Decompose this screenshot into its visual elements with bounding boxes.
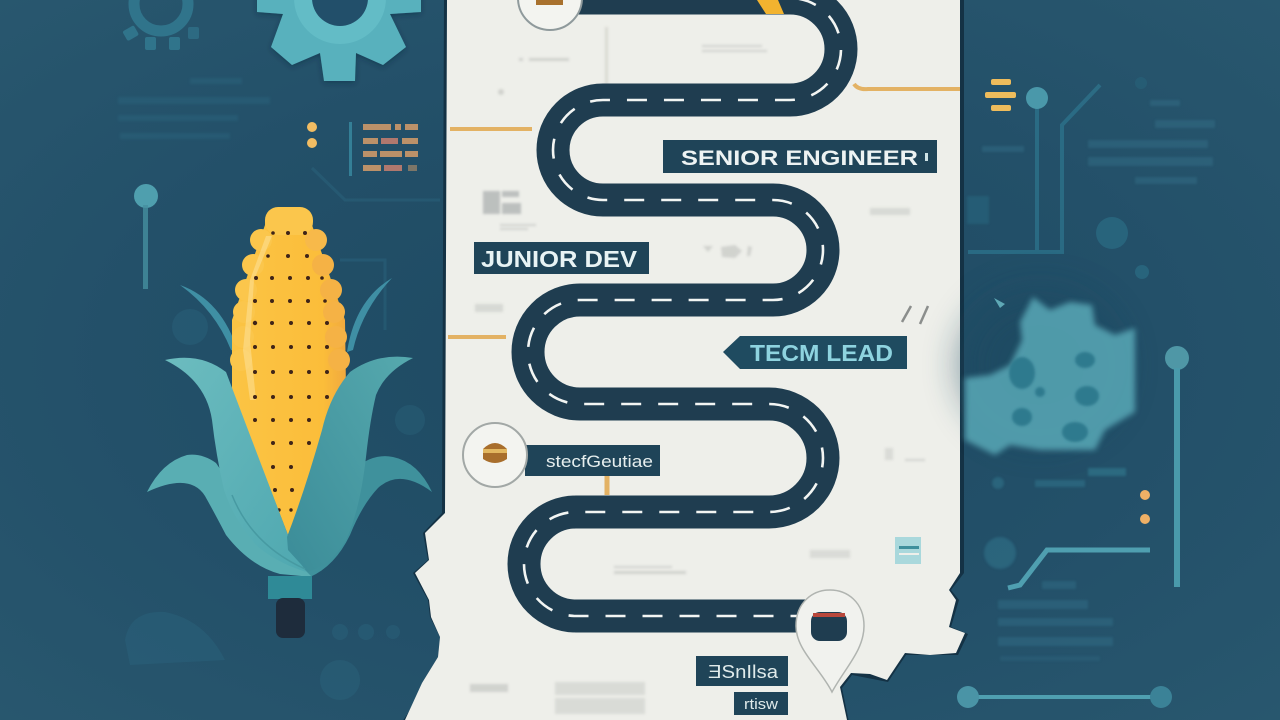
accent slashes <box>902 306 928 324</box>
label: JUNIOR DEV <box>474 242 649 274</box>
icon: pin node upper right <box>1026 87 1048 109</box>
faded circles right <box>1096 77 1149 279</box>
big right leaf <box>287 357 413 572</box>
kernel dots <box>253 231 329 512</box>
icon: orange dots left <box>307 122 317 148</box>
road centre dashes <box>524 0 841 616</box>
side note: small coloured text lines <box>349 122 418 176</box>
leaf crease <box>232 495 305 569</box>
ghost text block: upper left <box>118 78 270 139</box>
label: SENIOR ENGINEER: SENIOR ENGINEER <box>681 147 918 170</box>
stem <box>276 598 305 638</box>
faded paper details <box>470 27 925 714</box>
orange dots right <box>1140 490 1150 524</box>
label: bottom tag 1: ƎSnIlsa <box>708 662 779 682</box>
label: TECM LEAD: TECM LEAD <box>750 340 893 366</box>
paper panel <box>402 0 968 720</box>
ghost text block: upper right <box>967 100 1215 224</box>
circuit traces right <box>968 85 1100 252</box>
mini chart icon <box>895 537 921 564</box>
milestone: architect label and icon: stecfGeutiae <box>546 452 653 471</box>
milestone: architect label and icon <box>463 423 660 487</box>
icon: pin node left <box>134 184 158 289</box>
label: bottom tag 1 <box>696 656 788 686</box>
destination pin <box>796 590 864 692</box>
orange accent lines <box>448 84 960 495</box>
connector with end nodes <box>957 686 1172 708</box>
icon: large gear <box>257 0 421 81</box>
label: SENIOR ENGINEER <box>663 140 937 173</box>
label: JUNIOR DEV: JUNIOR DEV <box>481 246 638 272</box>
circuit traces left <box>312 168 440 330</box>
big left leaf <box>165 358 306 572</box>
pin node lower right <box>1165 346 1189 587</box>
thin leaves <box>180 285 238 352</box>
icon: orange menu bars <box>985 79 1016 111</box>
ghost tags right <box>984 468 1126 569</box>
ghost text block: lower right <box>998 581 1113 661</box>
label: bottom tag 2: rtisw <box>744 696 778 713</box>
corn cob <box>230 207 350 535</box>
angled trace <box>1008 550 1150 588</box>
abstract blob map <box>960 290 1135 455</box>
label: TECM LEAD <box>723 336 907 369</box>
road surface <box>524 0 841 616</box>
icon: small faded gear <box>122 0 199 50</box>
faded circles left <box>125 309 425 700</box>
lower left leaf <box>147 455 312 577</box>
illustration: corn <box>147 207 432 638</box>
winding road <box>524 0 841 616</box>
lower right leaf <box>300 456 432 577</box>
start marker circle <box>518 0 582 30</box>
label: bottom tag 2 <box>734 692 788 715</box>
yellow road marker <box>757 0 784 14</box>
stem collar <box>268 576 312 599</box>
